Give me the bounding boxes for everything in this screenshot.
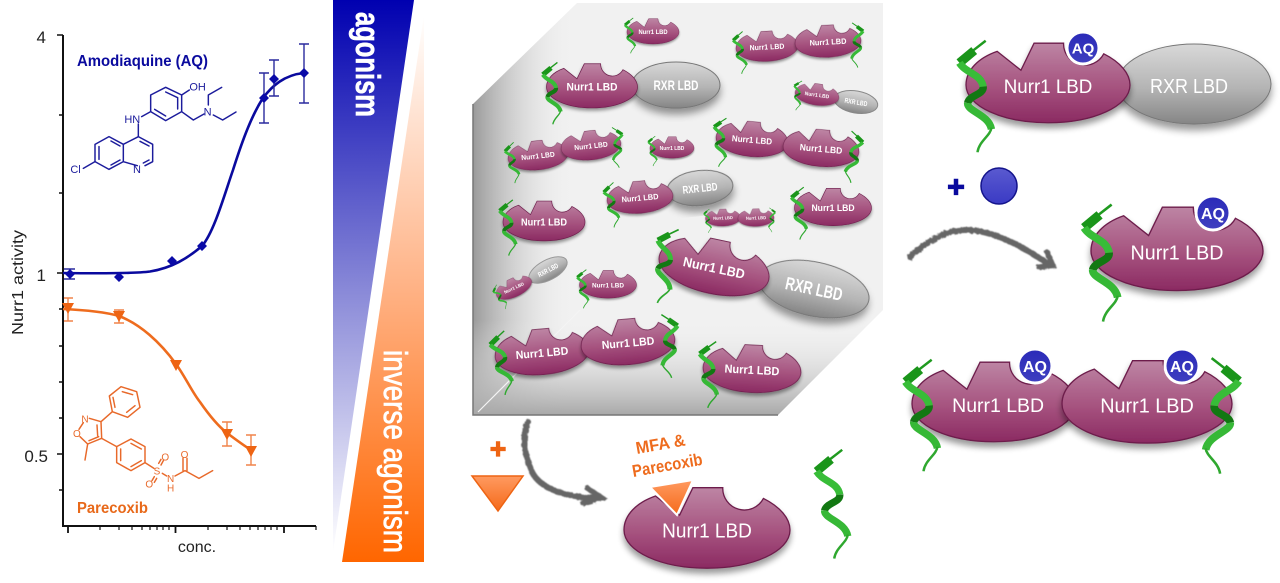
amodiaquine structure: OH	[189, 82, 206, 94]
homodimer bottom left: Nurr1 LBD	[601, 335, 655, 352]
homodimer centre right: Nurr1 LBD	[799, 142, 843, 156]
heterodimer upper left	[543, 62, 720, 124]
parecoxib structure: N	[81, 415, 89, 426]
y axis labels: 0.5	[24, 447, 48, 466]
amodiaquine curve	[63, 44, 309, 282]
icon: blue circle ligand	[981, 168, 1017, 204]
parecoxib structure: O	[181, 450, 189, 461]
Nurr1 LBD: Nurr1 LBD	[1131, 242, 1223, 265]
right Nurr1 LBD	[1062, 358, 1239, 474]
homodimer bottom left: Nurr1 LBD	[515, 345, 569, 362]
amodiaquine structure: HN	[124, 114, 140, 126]
large tilted heterodimer: RXR LBD	[784, 273, 844, 305]
agonism wedge	[333, 0, 414, 552]
right Nurr1 LBD: Nurr1 LBD	[1100, 396, 1194, 417]
left AQ ligand: AQ	[1023, 359, 1047, 376]
heterodimer upper left: RXR LBD	[654, 77, 698, 93]
tiny homodimer: Nurr1 LBD	[713, 215, 733, 221]
homodimer top right	[733, 22, 865, 74]
dose-response chart	[10, 28, 316, 556]
inverse agonism wedge	[342, 15, 424, 562]
monomer bottom	[697, 341, 802, 413]
panel: protein mixture in solution	[473, 3, 883, 415]
right AQ ligand: AQ	[1170, 359, 1194, 376]
heterodimer upper left: Nurr1 LBD	[567, 82, 618, 94]
small monomer centre	[648, 136, 694, 166]
AQ bound heterodimer	[959, 32, 1271, 152]
Nurr1 LBD	[624, 488, 790, 568]
RXR LBD: RXR LBD	[1150, 76, 1228, 98]
agonism label: agonism	[348, 12, 386, 117]
amodiaquine structure: N	[204, 106, 212, 118]
monomer right: Nurr1 LBD	[811, 203, 855, 213]
Nurr1 LBD: Nurr1 LBD	[1004, 76, 1092, 98]
AQ bound homodimer	[905, 349, 1239, 474]
small monomer lower left: Nurr1 LBD	[592, 282, 624, 289]
monomer bottom: Nurr1 LBD	[724, 362, 780, 378]
monomer top: Nurr1 LBD	[638, 29, 668, 36]
left AQ ligand	[1018, 349, 1052, 383]
parecoxib structure: N	[167, 474, 174, 485]
y axis labels: 4	[37, 28, 46, 47]
icon: orange triangle ligand	[472, 476, 523, 511]
amodiaquine structure: N	[133, 164, 141, 176]
axes	[57, 35, 316, 533]
Nurr1 LBD	[1084, 205, 1263, 322]
helix: released coactivator peptide	[817, 450, 848, 559]
small heterodimer right	[791, 80, 880, 117]
parecoxib curve	[62, 298, 257, 465]
parecoxib structure: S	[154, 466, 161, 477]
arrow: to inverse agonist complex	[524, 422, 602, 503]
amodiaquine label: Amodiaquine (AQ)	[77, 53, 208, 70]
homodimer left	[504, 127, 626, 184]
small tilted heterodimer: Nurr1 LBD	[503, 281, 525, 295]
homodimer centre right	[711, 117, 864, 184]
panel background	[473, 3, 883, 415]
small monomer centre: Nurr1 LBD	[660, 146, 684, 152]
heterodimer centre: Nurr1 LBD	[621, 192, 659, 204]
x axis title: conc.	[178, 539, 216, 556]
ligand label: Parecoxib	[631, 450, 704, 481]
parecoxib structure: O	[73, 429, 81, 440]
monomer right	[791, 187, 872, 240]
y axis labels: 1	[37, 266, 46, 285]
large tilted heterodimer	[645, 226, 874, 327]
left Nurr1 LBD: Nurr1 LBD	[952, 395, 1044, 417]
heterodimer centre: RXR LBD	[682, 181, 718, 197]
ligand label: MFA &	[634, 431, 687, 458]
monomer left: Nurr1 LBD	[521, 217, 567, 228]
y axis labels	[24, 28, 48, 466]
small tilted heterodimer: RXR LBD	[537, 263, 560, 279]
parecoxib structure: O	[161, 452, 169, 463]
monomer left	[500, 200, 585, 256]
left Nurr1 LBD	[905, 360, 1076, 471]
plus sign: blue: +	[947, 171, 965, 204]
tiny homodimer	[704, 208, 776, 233]
arrow: to agonist complex	[910, 230, 1053, 267]
AQ ligand	[1067, 32, 1099, 64]
ligand label	[627, 428, 704, 481]
Nurr1 LBD: Nurr1 LBD	[662, 520, 752, 542]
small heterodimer right: RXR LBD	[844, 98, 868, 108]
homodimer centre right: Nurr1 LBD	[731, 133, 773, 147]
tiny homodimer: Nurr1 LBD	[746, 215, 766, 221]
monomer top	[625, 18, 679, 53]
homodimer bottom left	[489, 313, 682, 396]
AQ bound monomer	[1084, 196, 1263, 322]
icon: bound triangle ligand	[650, 480, 693, 515]
amodiaquine structure: Cl	[70, 164, 81, 176]
y axis title: Nurr1 activity	[10, 230, 27, 335]
small monomer lower left	[577, 270, 636, 308]
AQ ligand	[1196, 196, 1230, 230]
AQ ligand: AQ	[1201, 206, 1225, 223]
parecoxib structure: O	[145, 479, 153, 490]
small tilted heterodimer	[491, 251, 571, 311]
right AQ ligand	[1165, 349, 1199, 383]
parecoxib structure	[73, 387, 213, 494]
amodiaquine structure	[70, 82, 236, 176]
homodimer top right: Nurr1 LBD	[749, 42, 785, 52]
AQ ligand: AQ	[1072, 40, 1095, 58]
homodimer left: Nurr1 LBD	[574, 140, 608, 152]
small heterodimer right: Nurr1 LBD	[804, 91, 830, 100]
homodimer left: Nurr1 LBD	[521, 150, 555, 162]
homodimer top right: Nurr1 LBD	[809, 37, 847, 48]
RXR LBD	[1117, 44, 1271, 124]
Nurr1 LBD	[959, 41, 1130, 152]
heterodimer centre	[603, 167, 735, 228]
inverse agonist bound Nurr1	[624, 428, 790, 568]
plus sign: orange: +	[490, 433, 506, 464]
large tilted heterodimer: Nurr1 LBD	[682, 254, 747, 282]
parecoxib structure: H	[167, 483, 174, 494]
parecoxib label: Parecoxib	[77, 500, 148, 517]
